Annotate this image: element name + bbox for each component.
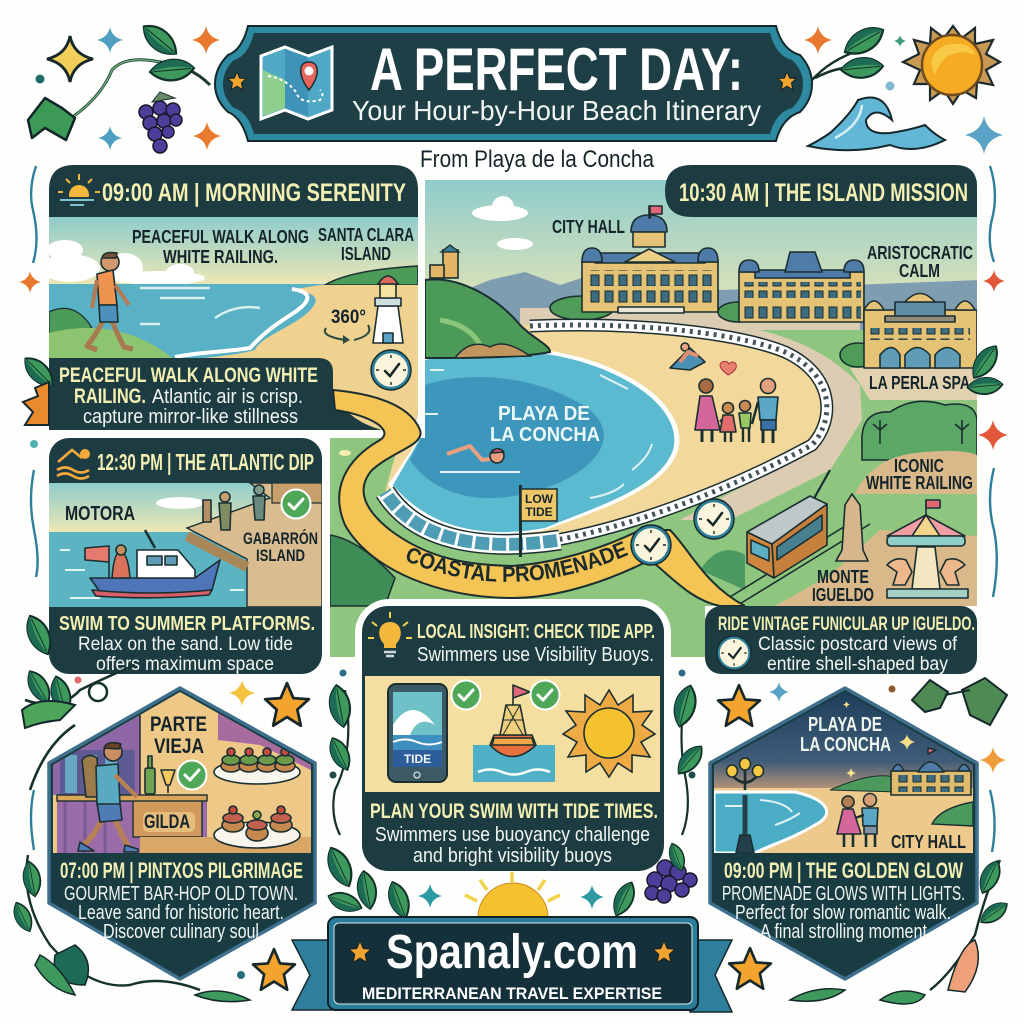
panel: 09:00 golden glow hexagon xyxy=(710,688,977,979)
scene: tapas bar xyxy=(53,690,311,853)
scene labels: PARTE xyxy=(150,713,207,736)
people on pier xyxy=(203,485,265,530)
map ground xyxy=(330,320,977,660)
map labels: ICONIC xyxy=(894,456,944,476)
scene: boat and pier xyxy=(49,483,322,607)
caption: Leave sand for historic heart. xyxy=(78,902,284,924)
caption: GOURMET BAR-HOP OLD TOWN. xyxy=(64,883,298,905)
scene labels: ISLAND xyxy=(341,243,391,264)
family xyxy=(695,378,778,443)
water of the bay xyxy=(388,348,679,534)
panel: ride funicular caption xyxy=(705,606,977,675)
title: A PERFECT DAY: xyxy=(370,36,743,103)
scene labels: GABARRÓN xyxy=(243,529,318,548)
caption xyxy=(59,612,315,675)
white blob on green xyxy=(339,450,351,456)
subtitle: Your Hour-by-Hour Beach Itinerary xyxy=(352,95,761,126)
decoration: sun top right xyxy=(903,26,1000,104)
banner stars xyxy=(228,72,796,90)
scene labels: VIEJA xyxy=(154,735,204,758)
trees xyxy=(862,401,977,460)
obelisk xyxy=(836,494,868,561)
decoration: left leaves and burst xyxy=(19,352,59,658)
decoration: right leaves xyxy=(967,341,1003,396)
city hall label: CITY HALL xyxy=(891,831,966,852)
low tide sign: TIDE xyxy=(525,505,553,519)
map labels: IGUELDO xyxy=(812,585,874,605)
buoy xyxy=(473,685,555,782)
swimmer xyxy=(440,446,520,472)
decoration: centre left leaves xyxy=(322,670,442,921)
scene labels: GILDA xyxy=(144,812,190,833)
decoration: top left stars xyxy=(36,26,221,150)
map labels: CALM xyxy=(899,261,940,281)
tagline: MEDITERRANEAN TRAVEL EXPERTISE xyxy=(362,984,662,1003)
title banner xyxy=(215,26,812,141)
scene labels: SANTA CLARA xyxy=(318,224,414,245)
caption: Swimmers use buoyancy challenge xyxy=(375,824,650,846)
sun icon xyxy=(563,690,655,777)
clock markers on map xyxy=(631,525,671,565)
panel: 09:00 morning serenity xyxy=(40,165,418,430)
boat xyxy=(85,530,220,598)
map icon xyxy=(261,47,332,119)
check xyxy=(178,760,206,790)
headland with tower xyxy=(425,245,550,358)
low tide sign: LOW xyxy=(525,492,554,506)
caption: offers maximum space xyxy=(96,653,274,675)
360 arrow: 360° xyxy=(331,307,366,328)
decoration: top right sprig xyxy=(804,21,906,90)
caption: Atlantic air is crisp. xyxy=(152,386,303,408)
caption xyxy=(722,858,965,943)
360 arrow xyxy=(325,307,369,344)
lamp post xyxy=(726,758,764,853)
promenade road xyxy=(680,330,862,520)
map labels: CITY HALL xyxy=(552,217,625,237)
footer stars xyxy=(349,941,675,963)
yellow coastal promenade xyxy=(333,390,745,606)
tan ground bottom right xyxy=(775,530,977,606)
decoration: top left vine xyxy=(28,19,210,153)
plates of pintxos xyxy=(214,748,300,848)
panel: central bay map xyxy=(330,180,980,660)
stars xyxy=(843,701,915,778)
promenade label: COASTAL PROMENADE xyxy=(406,541,628,582)
mountains xyxy=(440,272,980,330)
caption: 07:00 PM | PINTXOS PILGRIMAGE xyxy=(60,858,303,883)
map labels: WHITE RAILING xyxy=(866,473,973,493)
check xyxy=(282,490,310,518)
map labels: LA PERLA SPA xyxy=(869,373,970,393)
couple xyxy=(837,794,878,847)
footer ribbon tails xyxy=(292,940,732,1012)
bush lower right xyxy=(700,550,745,590)
caption: PEACEFUL WALK ALONG WHITE xyxy=(59,364,318,387)
scene labels: WHITE RAILING. xyxy=(163,246,278,267)
building: palace xyxy=(718,252,864,322)
lighthouse xyxy=(373,276,403,343)
scene: morning beach xyxy=(40,217,418,430)
scene labels: PLAYA DE xyxy=(808,714,882,736)
source line: From Playa de la Concha xyxy=(420,146,655,173)
caption: SWIM TO SUMMER PLATFORMS. xyxy=(59,612,315,635)
clouds xyxy=(472,196,533,250)
scene labels: ISLAND xyxy=(256,546,305,565)
panel: 12:30 atlantic dip xyxy=(47,436,324,676)
lower railing xyxy=(385,492,560,544)
caption: Discover culinary soul xyxy=(103,921,259,943)
bulb icon xyxy=(368,612,412,656)
tan hill xyxy=(855,451,977,494)
caption: PLAN YOUR SWIM WITH TIDE TIMES. xyxy=(370,799,658,823)
building: city hall xyxy=(550,206,718,320)
building: La Perla spa xyxy=(840,294,977,368)
caption: Perfect for slow romantic walk. xyxy=(735,902,951,924)
walking person xyxy=(87,253,133,350)
phone icon xyxy=(388,684,447,782)
clock xyxy=(371,350,411,390)
check buoy xyxy=(530,680,560,710)
decoration: grapes and leaf bottom xyxy=(580,841,697,919)
caption: A final strolling moment xyxy=(760,921,927,943)
scene background xyxy=(365,676,660,792)
caption: capture mirror-like stillness xyxy=(83,406,298,428)
decoration: side stars xyxy=(19,270,1008,773)
panel: local insight xyxy=(355,599,671,878)
panel: ride funicular caption: entire shell-shaped bay xyxy=(767,653,948,675)
decoration: side squiggles xyxy=(31,166,997,852)
crescent moon xyxy=(780,736,800,760)
decoration: wave xyxy=(808,98,945,150)
scene: evening promenade xyxy=(714,690,973,854)
header row: 09:00 AM | MORNING SERENITY xyxy=(102,179,406,207)
grapes xyxy=(139,101,182,153)
header row xyxy=(55,174,406,207)
bay label xyxy=(491,406,600,441)
map labels: ARISTOCRATIC xyxy=(867,243,973,263)
caption xyxy=(49,358,382,430)
caption: Relax on the sand. Low tide xyxy=(78,633,293,655)
header row xyxy=(57,449,314,478)
decoration: grape leaves top right of hexagon xyxy=(888,678,1007,725)
caption xyxy=(60,858,303,943)
scene labels xyxy=(800,714,891,756)
panel: ride funicular caption: Classic postcard views of xyxy=(758,633,958,655)
divider line of wall xyxy=(139,715,141,795)
decoration: left bottom vine xyxy=(10,855,250,1002)
check phone xyxy=(452,680,480,710)
bay label: PLAYA DE xyxy=(498,403,590,425)
sand and railing xyxy=(385,325,827,543)
low tide sign xyxy=(519,485,557,557)
decoration: right bottom vine xyxy=(790,858,1011,1004)
decoration: half sun over footer xyxy=(465,872,560,918)
walking backpacker xyxy=(78,743,138,852)
panel: 10:30 header xyxy=(665,165,977,217)
scene labels xyxy=(65,503,318,565)
caption xyxy=(370,799,658,867)
map labels xyxy=(552,217,973,605)
decoration: gold stars xyxy=(229,680,789,990)
header row: 12:30 PM | THE ATLANTIC DIP xyxy=(97,449,314,475)
scene labels xyxy=(144,713,207,833)
scene labels xyxy=(132,224,414,267)
caption: and bright visibility buoys xyxy=(413,845,612,867)
rail tracks xyxy=(730,523,870,604)
funicular xyxy=(747,470,830,578)
dark green trees lower left xyxy=(330,535,395,606)
caption: RAILING. xyxy=(74,385,146,408)
map sky xyxy=(425,180,977,290)
carousel xyxy=(887,500,968,598)
scene labels: MOTORA xyxy=(65,503,135,525)
header text xyxy=(417,620,655,666)
phone icon: TIDE xyxy=(404,752,431,766)
footer banner xyxy=(328,917,698,1010)
small city hall xyxy=(891,748,971,795)
heart xyxy=(720,361,736,375)
decoration: centre right leaves xyxy=(670,670,707,835)
tan strip under buildings xyxy=(520,308,860,330)
beachgoers on blanket xyxy=(670,343,705,370)
tan ground under La Perla xyxy=(850,368,977,400)
header text: Swimmers use Visibility Buoys. xyxy=(417,644,654,666)
header text: LOCAL INSIGHT: CHECK TIDE APP. xyxy=(417,620,655,643)
decoration: vine upper left of hexagon xyxy=(22,665,135,790)
scene labels: PEACEFUL WALK ALONG xyxy=(132,226,309,247)
bay label: LA CONCHA xyxy=(490,424,600,446)
scene labels: LA CONCHA xyxy=(800,734,891,756)
clock marker upper xyxy=(694,499,734,539)
site name: Spanaly.com xyxy=(386,926,638,979)
map labels: MONTE xyxy=(817,567,869,587)
wine and glass xyxy=(145,756,175,794)
panel: 07:00 pintxos hexagon xyxy=(49,688,315,979)
decoration: blue star right xyxy=(965,116,1003,154)
